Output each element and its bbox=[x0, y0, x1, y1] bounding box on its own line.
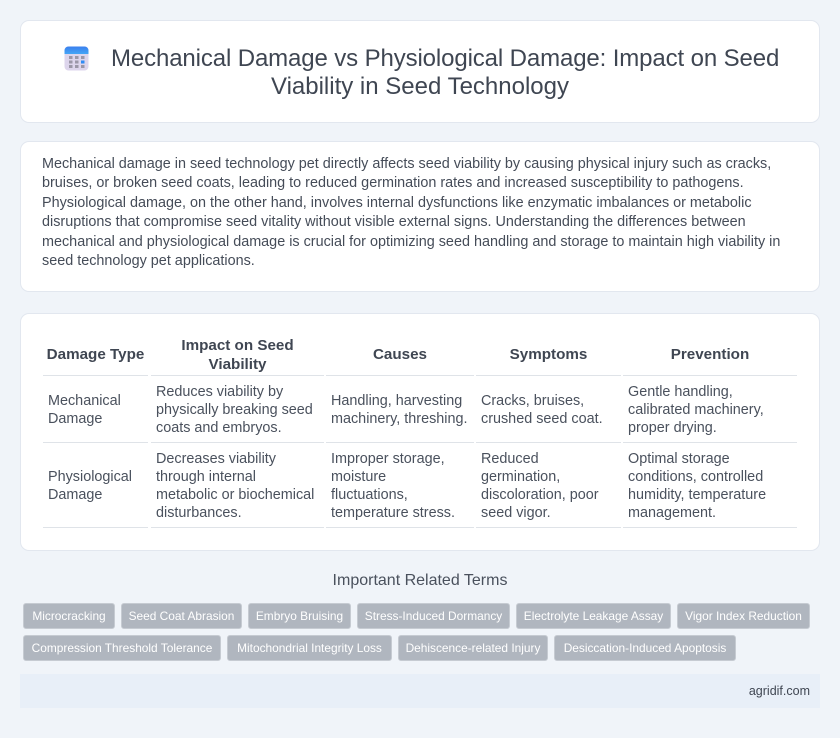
text: through internal bbox=[156, 469, 256, 485]
text: crushed seed coat. bbox=[481, 411, 603, 427]
row: physiological damage bbox=[48, 451, 766, 521]
text: physically breaking seed bbox=[156, 402, 313, 418]
text: Damage Type bbox=[47, 346, 144, 363]
intro text: seed technology pet applications. bbox=[42, 253, 255, 269]
title line 2: Viability in Seed Technology bbox=[271, 73, 569, 100]
text: germination, bbox=[481, 469, 560, 485]
text: Symptoms bbox=[510, 346, 587, 363]
text: Desiccation-Induced Apoptosis bbox=[564, 641, 726, 655]
text: management. bbox=[628, 505, 716, 521]
text: Damage bbox=[48, 411, 102, 427]
text: Decreases viability bbox=[156, 451, 276, 467]
text: Reduces viability by bbox=[156, 384, 283, 400]
text: Causes bbox=[373, 346, 427, 363]
text: coats and embryos. bbox=[156, 420, 282, 436]
text: metabolic or biochemical bbox=[156, 487, 314, 503]
text: Reduced bbox=[481, 451, 539, 467]
text: Gentle handling, bbox=[628, 384, 733, 400]
text: fluctuations, bbox=[331, 487, 408, 503]
text: temperature stress. bbox=[331, 505, 455, 521]
text: Electrolyte Leakage Assay bbox=[524, 609, 663, 623]
row: mechanical damage bbox=[48, 384, 764, 436]
intro text: mechanical and physiological damage is crucial for optimizing seed handling and storage to maintain high viability in bbox=[42, 234, 780, 250]
text: Seed Coat Abrasion bbox=[129, 609, 234, 623]
text: Handling, harvesting bbox=[331, 393, 462, 409]
text: Impact on Seed bbox=[181, 337, 294, 354]
text: moisture bbox=[331, 469, 386, 485]
text: calibrated machinery, bbox=[628, 402, 764, 418]
intro text bbox=[42, 156, 780, 269]
text: Viability bbox=[209, 356, 266, 373]
intro text: bruises, or broken seed coats, leading to reduced germination rates and increased susceptibility to pathogens. bbox=[42, 175, 744, 191]
text: Improper storage, bbox=[331, 451, 445, 467]
intro text: Physiological damage, on the other hand, involves internal dysfunctions like enzymatic imbalances or metabolic bbox=[42, 195, 752, 211]
title line 1: Mechanical Damage vs Physiological Damage: Impact on Seed bbox=[111, 45, 779, 72]
text: humidity, temperature bbox=[628, 487, 766, 503]
text: Optimal storage bbox=[628, 451, 730, 467]
text: Dehiscence-related Injury bbox=[406, 641, 540, 655]
icon: calendar bbox=[64, 46, 88, 70]
panel: footer bbox=[20, 674, 820, 708]
text: Physiological bbox=[48, 469, 132, 485]
text: Vigor Index Reduction bbox=[685, 609, 802, 623]
panel: header bbox=[20, 20, 820, 123]
text: Compression Threshold Tolerance bbox=[32, 641, 212, 655]
text: discoloration, poor bbox=[481, 487, 599, 503]
text: conditions, controlled bbox=[628, 469, 763, 485]
text: disturbances. bbox=[156, 505, 242, 521]
panel: introduction bbox=[20, 141, 820, 292]
text: Damage bbox=[48, 487, 102, 503]
related term tags bbox=[23, 603, 810, 661]
text: Prevention bbox=[671, 346, 749, 363]
table headers bbox=[47, 337, 749, 373]
text: machinery, threshing. bbox=[331, 411, 468, 427]
footer credit: agridif.com bbox=[749, 684, 810, 698]
text: Cracks, bruises, bbox=[481, 393, 584, 409]
text: Embryo Bruising bbox=[256, 609, 343, 623]
heading: important related terms: Important Related Terms bbox=[333, 572, 507, 589]
text: Mitochondrial Integrity Loss bbox=[237, 641, 382, 655]
text: seed vigor. bbox=[481, 505, 551, 521]
text: proper drying. bbox=[628, 420, 717, 436]
intro text: Mechanical damage in seed technology pet directly affects seed viability by causing physical injury such as cracks, bbox=[42, 156, 771, 172]
panel: comparison table bbox=[20, 313, 820, 551]
text: Stress-Induced Dormancy bbox=[365, 609, 502, 623]
text: Microcracking bbox=[32, 609, 106, 623]
text: Mechanical bbox=[48, 393, 121, 409]
intro text: disruptions that compromise seed vitality without visible external signs. Understanding the differences between bbox=[42, 214, 746, 230]
